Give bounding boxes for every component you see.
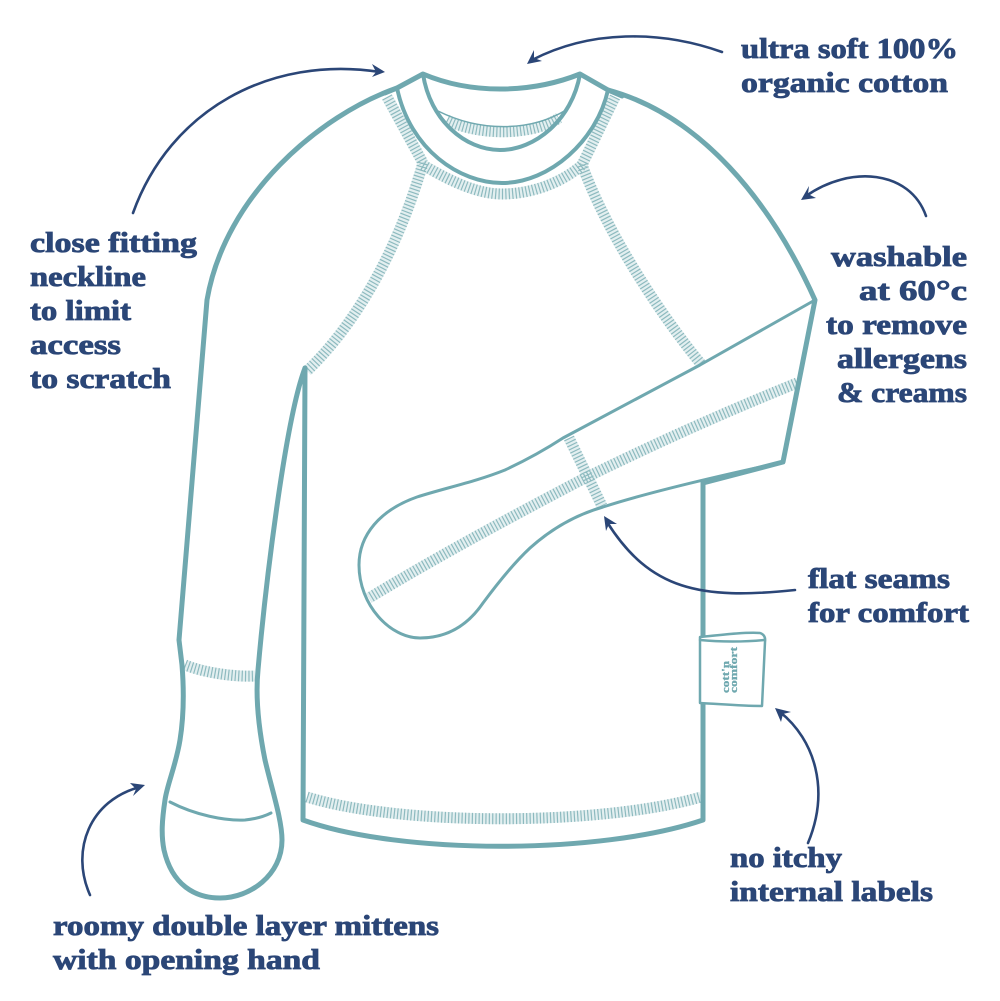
text: close fitting neckline: to scratch — [30, 364, 172, 395]
text: washable at 60c — [826, 242, 967, 409]
text: flat seams: for comfort — [808, 598, 970, 629]
arrow: washable callout — [801, 176, 926, 216]
text: roomy mittens: roomy double layer mittens — [53, 911, 439, 942]
text: close fitting neckline: neckline — [30, 262, 146, 293]
text: close fitting neckline: to limit — [30, 296, 132, 327]
text: no itchy labels: internal labels — [730, 877, 933, 908]
text: flat seams — [808, 564, 970, 629]
text: washable at 60c: to remove — [826, 310, 967, 341]
text: washable at 60c: allergens — [837, 344, 967, 375]
text: close fitting neckline: access — [30, 330, 121, 361]
text: roomy mittens: with opening hand — [53, 945, 321, 976]
mitten fold — [170, 802, 271, 820]
right shoulder and sleeve outline — [608, 90, 815, 483]
text: ultra soft cotton: organic cotton — [741, 68, 949, 99]
text: no itchy labels: no itchy — [730, 843, 842, 874]
body outline — [303, 368, 703, 846]
arrow: label callout — [775, 708, 818, 843]
text: washable at 60c: washable — [831, 242, 967, 273]
text: roomy mittens — [53, 911, 439, 976]
neck band — [385, 74, 622, 183]
label brand text: cott'n — [720, 661, 732, 693]
left sleeve and mitten outline — [162, 88, 397, 898]
text: close fitting neckline — [30, 228, 197, 395]
text: no itchy labels — [730, 843, 933, 908]
folded sleeve outline — [359, 300, 815, 638]
garment label — [700, 633, 765, 706]
text: ultra soft cotton — [741, 34, 958, 99]
flat seams on garment — [185, 97, 797, 819]
arrow: neckline callout — [133, 64, 385, 213]
garment label: comfort — [728, 647, 740, 693]
text: close fitting neckline: close fitting — [30, 228, 197, 259]
garment: long-sleeved top — [162, 74, 815, 898]
text: ultra soft cotton: ultra soft 100% — [741, 34, 958, 65]
text: washable at 60c: at 60°c — [859, 276, 967, 307]
text: washable at 60c: & creams — [837, 378, 967, 409]
arrow: mitten callout — [82, 783, 145, 895]
arrow: cotton callout — [527, 36, 722, 64]
text: flat seams: flat seams — [808, 564, 950, 595]
arrow: flat seams callout — [604, 516, 795, 593]
